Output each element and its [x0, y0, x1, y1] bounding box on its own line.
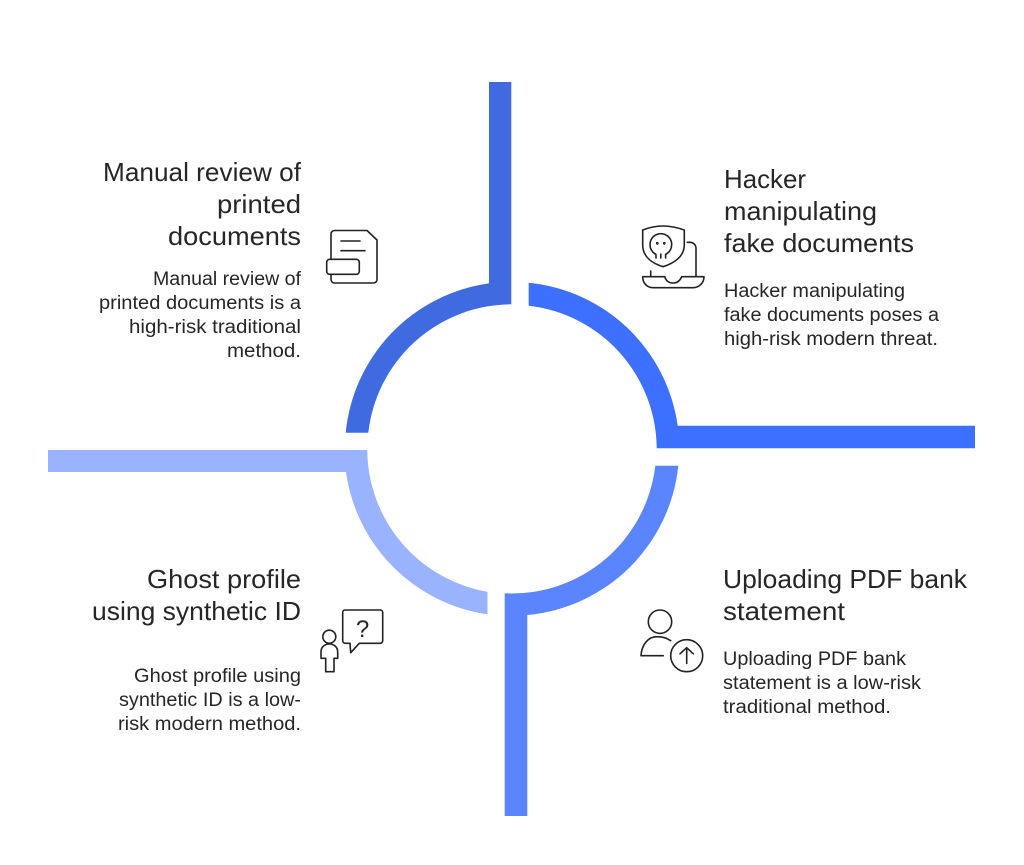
heading: manual review: printed: [217, 189, 301, 219]
panel: hacker manipulating fake documents: [643, 164, 939, 350]
text block: manual review description: method.: [227, 341, 301, 362]
text block: hacker description: Hacker manipulating: [724, 281, 905, 302]
text block: manual review description: printed documents is a: [99, 293, 301, 314]
heading: hacker: manipulating: [724, 196, 877, 226]
panel: ghost profile using synthetic id: [92, 564, 383, 735]
text block: ghost profile description: risk modern method.: [118, 714, 301, 735]
panel: manual review of printed documents: [99, 157, 377, 362]
text block: ghost profile description: synthetic ID is a low-: [119, 690, 301, 711]
text block: manual review description: [99, 269, 302, 362]
icon: person with upload arrow: [641, 610, 703, 672]
heading: uploading: statement: [723, 596, 846, 626]
heading: manual review: [103, 157, 302, 251]
text block: ghost profile description: [118, 666, 301, 735]
heading: hacker: Hacker: [724, 164, 806, 194]
panel: uploading pdf bank statement: [641, 564, 968, 718]
text block: manual review description: Manual review of: [153, 269, 302, 290]
icon: document: [327, 230, 377, 283]
text block: hacker description: [724, 281, 939, 350]
text block: ghost profile description: Ghost profile using: [134, 666, 301, 687]
heading: hacker: [724, 164, 914, 258]
text block: hacker description: high-risk modern threat.: [724, 329, 938, 350]
heading: uploading: Uploading PDF bank: [723, 564, 968, 594]
segment: top-left arc with vertical bar: [346, 82, 511, 433]
text block: hacker description: fake documents poses a: [724, 305, 939, 326]
text block: uploading description: traditional method.: [723, 697, 891, 718]
text block: manual review description: high-risk traditional: [129, 317, 301, 338]
text block: uploading description: [723, 649, 922, 718]
segment: top-right arc with horizontal bar: [529, 283, 975, 448]
icon: skull shield and laptop: [643, 226, 704, 288]
heading: ghost profile: Ghost profile: [147, 564, 301, 594]
text block: uploading description: statement is a low-risk: [723, 673, 922, 694]
heading: manual review: documents: [168, 221, 301, 251]
heading: uploading: [723, 564, 968, 626]
heading: hacker: fake documents: [724, 228, 914, 258]
icon: person with question bubble: [321, 610, 383, 672]
icon: person with question bubble: ?: [356, 616, 369, 643]
heading: manual review: Manual review of: [103, 157, 302, 187]
segment: bottom-left arc with horizontal bar: [48, 450, 488, 614]
segment: bottom-right arc with vertical bar: [505, 466, 678, 816]
heading: ghost profile: [92, 564, 301, 626]
heading: ghost profile: using synthetic ID: [92, 596, 301, 626]
text block: uploading description: Uploading PDF bank: [723, 649, 907, 670]
